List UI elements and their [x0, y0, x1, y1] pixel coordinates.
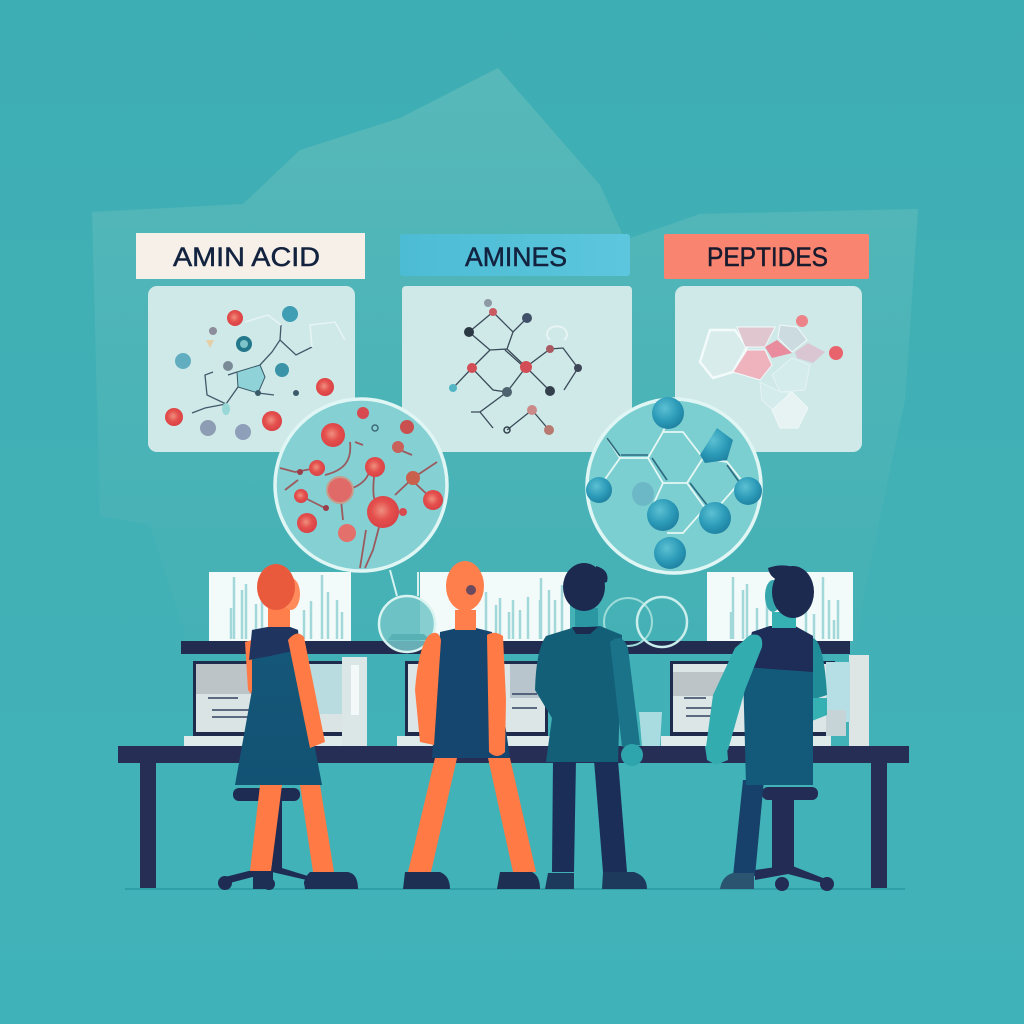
monitor: left — [184, 661, 349, 746]
sweater — [535, 626, 622, 762]
legs — [408, 758, 536, 872]
monitor: middle — [397, 661, 557, 746]
shoes — [253, 871, 358, 889]
table — [118, 746, 909, 889]
shoes — [403, 872, 540, 889]
backdrop shape — [92, 68, 918, 650]
neck — [455, 610, 476, 630]
neck — [575, 608, 598, 628]
far arm — [812, 638, 827, 700]
face — [765, 580, 781, 612]
label: peptides — [664, 234, 869, 279]
neck — [268, 606, 290, 627]
arm — [610, 638, 640, 747]
white chart panel: right — [707, 572, 853, 641]
hand — [705, 746, 728, 765]
hand — [621, 744, 643, 766]
legs — [552, 760, 627, 872]
arm — [706, 634, 762, 750]
dress — [235, 627, 322, 785]
magnifier: blue molecules — [586, 397, 762, 573]
person: man on stool side — [705, 565, 834, 891]
tower: right — [826, 655, 869, 746]
shoes — [545, 872, 647, 889]
torso — [432, 628, 510, 758]
white chart panel: middle — [420, 572, 570, 641]
magnifier: red molecules — [275, 399, 447, 571]
hair — [257, 564, 295, 610]
label: amines — [400, 234, 630, 276]
chair — [218, 788, 316, 890]
person: man in teal sweater — [535, 563, 647, 889]
person: woman with red hair — [218, 564, 358, 890]
stool — [755, 787, 834, 891]
label: amin acid: AMIN ACID — [173, 242, 320, 272]
flask: right pair — [604, 597, 687, 647]
panel: amines molecule — [402, 286, 632, 452]
panel: peptides molecule — [675, 286, 862, 452]
shoe — [720, 873, 754, 889]
neck — [772, 612, 796, 628]
cup — [639, 712, 662, 746]
tower: left — [342, 657, 367, 746]
monitor: right — [661, 661, 835, 746]
head — [446, 561, 484, 611]
white chart panel: left — [209, 572, 351, 641]
leg — [733, 780, 764, 876]
torso — [743, 626, 813, 785]
flask: left — [379, 570, 435, 652]
floor line — [125, 888, 905, 890]
head — [563, 563, 605, 611]
label: amines: AMINES — [465, 242, 567, 272]
label: amin acid — [136, 233, 365, 279]
hair — [772, 566, 814, 618]
face — [282, 578, 300, 610]
arm behind — [245, 640, 256, 700]
person: bald man in orange — [403, 561, 540, 889]
arm — [288, 634, 325, 748]
shelf — [181, 641, 850, 654]
panel: amino acid molecule — [148, 286, 355, 452]
legs — [250, 785, 334, 872]
arms — [415, 633, 441, 745]
label: peptides: PEPTIDES — [707, 242, 828, 272]
